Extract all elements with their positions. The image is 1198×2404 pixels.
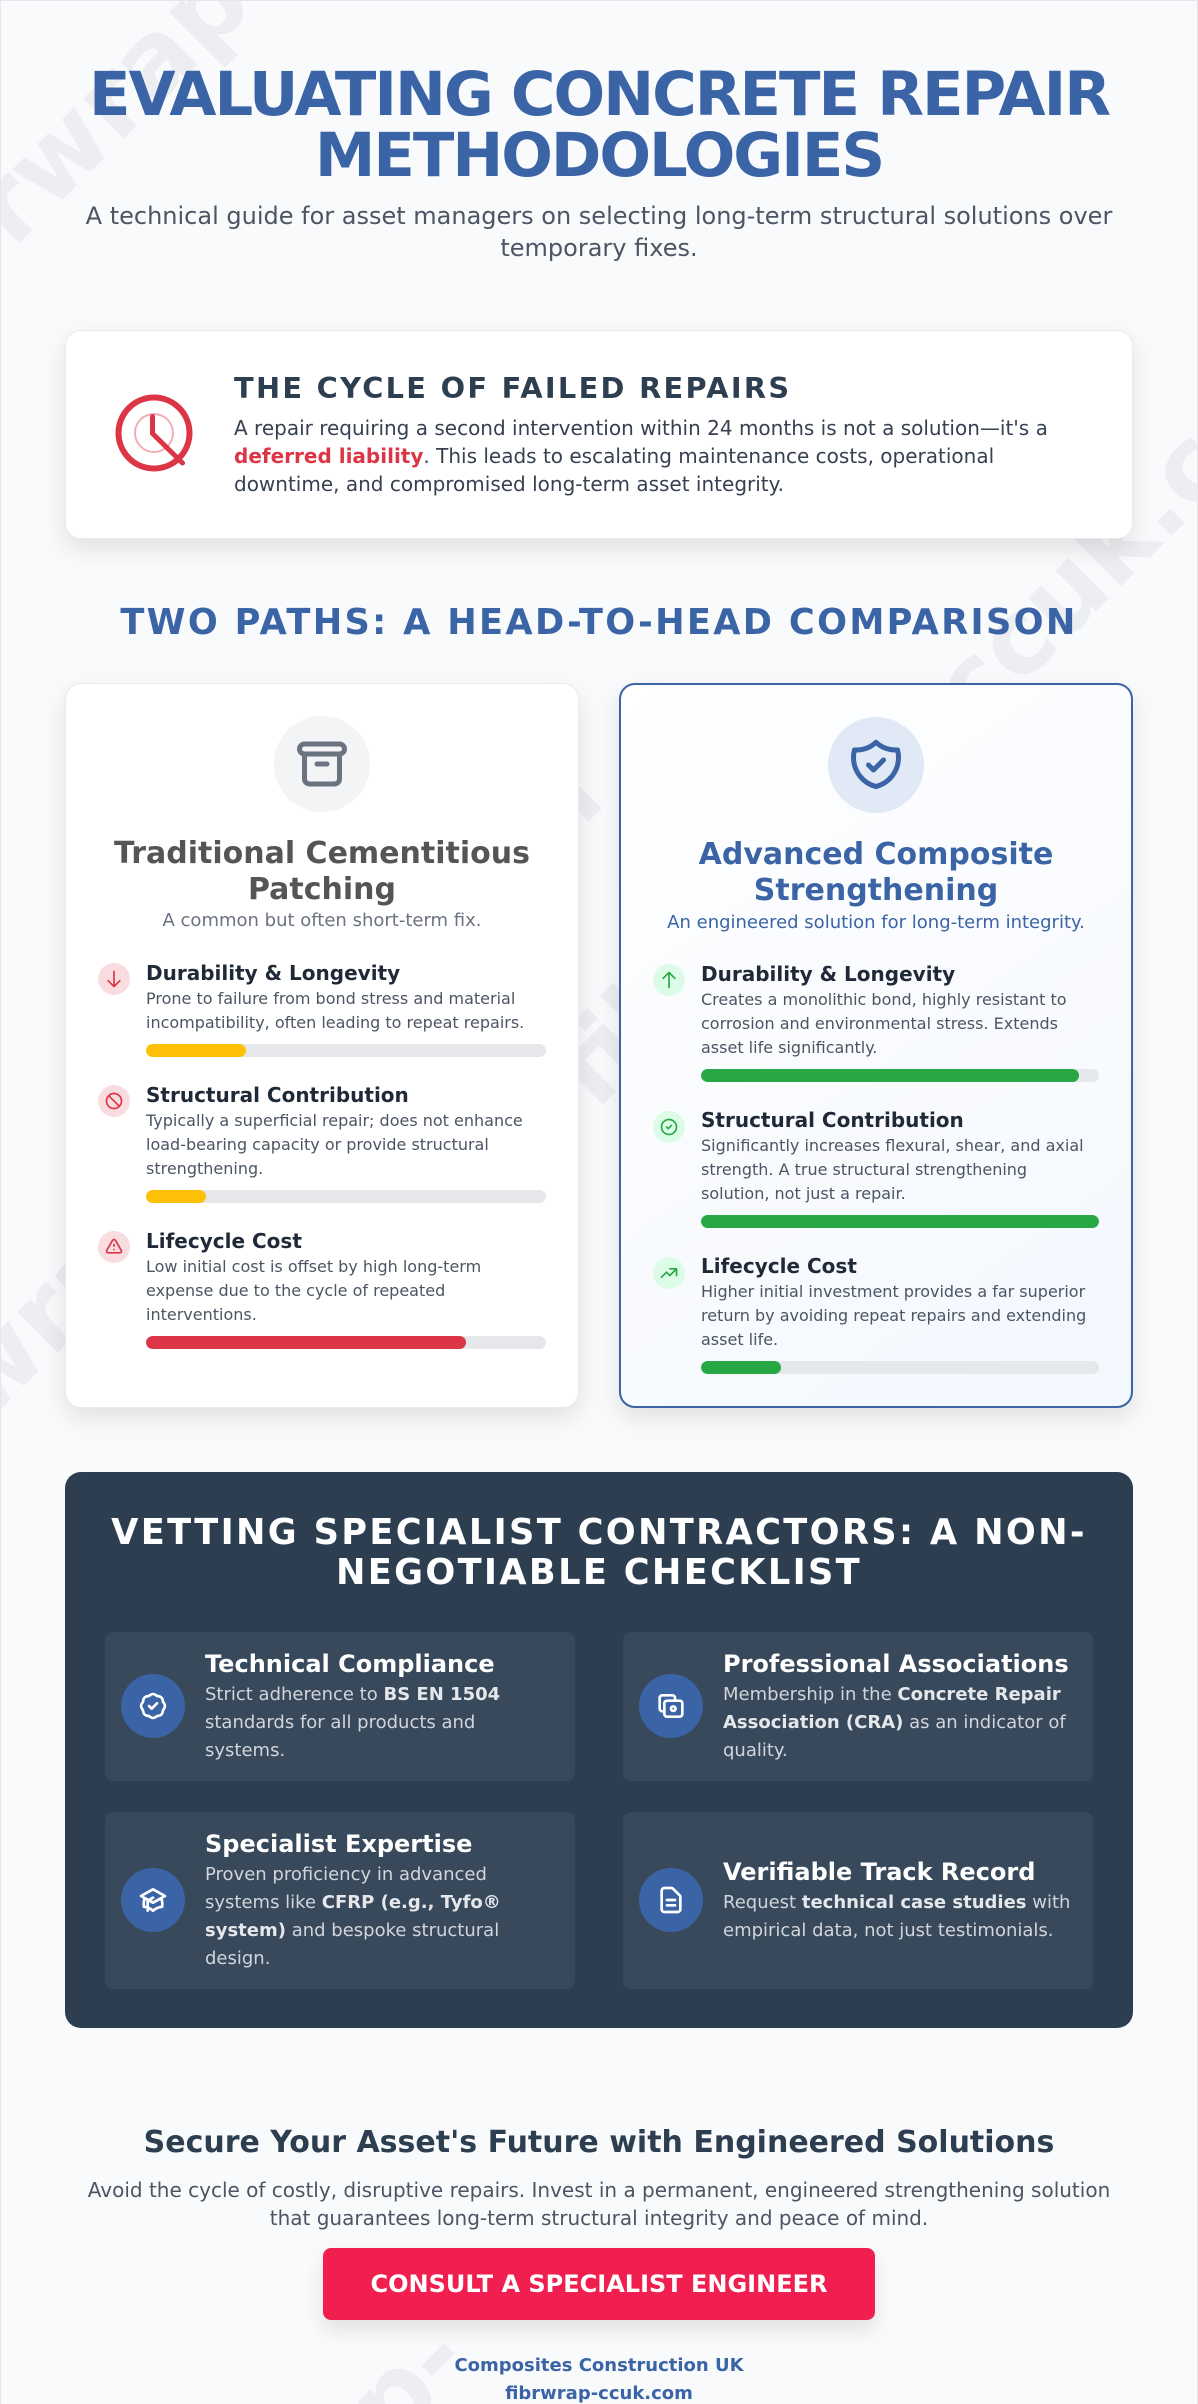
card title: Traditional Cementitious bbox=[114, 836, 530, 871]
call to action text: Avoid the cycle of costly, disruptive repairs. Invest in a permanent, engineered strengthening solution bbox=[88, 2178, 1110, 2202]
structural bar bbox=[701, 1215, 1099, 1228]
call to action button: CONSULT A SPECIALIST ENGINEER bbox=[371, 2270, 827, 2298]
footer: Composites Construction UK bbox=[454, 2355, 744, 2376]
icon: membership cards bbox=[639, 1674, 703, 1738]
item text: system) and bespoke structural bbox=[205, 1920, 499, 1941]
item text: design. bbox=[205, 1948, 270, 1969]
card title bbox=[114, 836, 530, 907]
subtitle bbox=[86, 202, 1112, 262]
section heading: two paths: TWO PATHS: A HEAD-TO-HEAD COMPARISON bbox=[120, 602, 1078, 643]
checklist: verifiable track record bbox=[623, 1812, 1093, 1989]
item text bbox=[205, 1864, 501, 1969]
item heading: Specialist Expertise bbox=[205, 1830, 472, 1858]
body text: downtime, and compromised long-term asset integrity. bbox=[234, 472, 784, 496]
structural text: Typically a superficial repair; does not enhance bbox=[146, 1111, 523, 1130]
icon: academic cap bbox=[121, 1868, 185, 1932]
icon: broken clock bbox=[116, 394, 192, 472]
footer: fibrwrap-ccuk.com bbox=[505, 2383, 693, 2404]
item text: Membership in the Concrete Repair bbox=[723, 1684, 1061, 1705]
durability text bbox=[146, 989, 524, 1032]
call to action heading: Secure Your Asset's Future with Engineered Solutions bbox=[144, 2125, 1054, 2160]
durability bar bbox=[701, 1069, 1099, 1082]
card title bbox=[698, 837, 1053, 908]
body text: A repair requiring a second intervention within 24 months is not a solution—it's a bbox=[234, 416, 1048, 440]
structural text: solution, not just a repair. bbox=[701, 1184, 906, 1203]
icon: document bbox=[639, 1868, 703, 1932]
title: METHODOLOGIES bbox=[315, 121, 883, 191]
durability icon bbox=[653, 964, 685, 996]
item text: quality. bbox=[723, 1740, 788, 1761]
structural text: strengthening. bbox=[146, 1159, 263, 1178]
lifecycle text: return by avoiding repeat repairs and extending bbox=[701, 1306, 1086, 1325]
section heading: NEGOTIABLE CHECKLIST bbox=[336, 1552, 862, 1593]
structural icon bbox=[653, 1111, 685, 1143]
checklist: professional associations bbox=[623, 1632, 1093, 1781]
card title: Advanced Composite bbox=[699, 837, 1053, 872]
card subtitle: A common but often short-term fix. bbox=[162, 910, 482, 931]
structural text: strength. A true structural strengthening bbox=[701, 1160, 1027, 1179]
structural text bbox=[146, 1111, 523, 1178]
durability heading: Durability & Longevity bbox=[701, 962, 955, 986]
title bbox=[89, 60, 1110, 191]
lifecycle text: Higher initial investment provides a far superior bbox=[701, 1282, 1085, 1301]
call to action text: that guarantees long-term structural integrity and peace of mind. bbox=[270, 2206, 928, 2230]
lifecycle icon bbox=[653, 1257, 685, 1289]
card title: Patching bbox=[248, 872, 396, 907]
footer bbox=[454, 2355, 744, 2404]
structural icon bbox=[98, 1085, 130, 1117]
lifecycle text: expense due to the cycle of repeated bbox=[146, 1281, 445, 1300]
item text: systems like CFRP (e.g., Tyfo® bbox=[205, 1892, 501, 1913]
structural text bbox=[701, 1136, 1084, 1203]
durability text: incompatibility, often leading to repeat repairs. bbox=[146, 1013, 524, 1032]
durability bar bbox=[146, 1044, 546, 1057]
structural text: Significantly increases flexural, shear, and axial bbox=[701, 1136, 1084, 1155]
card title: Strengthening bbox=[754, 873, 998, 908]
panel: traditional cementitious patching bbox=[65, 683, 579, 1408]
panel: vetting specialist contractors bbox=[65, 1472, 1133, 2028]
item text bbox=[205, 1684, 500, 1761]
item text: Strict adherence to BS EN 1504 bbox=[205, 1684, 500, 1705]
call to action text bbox=[88, 2178, 1110, 2230]
item heading: Verifiable Track Record bbox=[723, 1858, 1035, 1886]
call to action button bbox=[323, 2248, 875, 2320]
item text: systems. bbox=[205, 1740, 285, 1761]
durability text bbox=[701, 990, 1067, 1057]
lifecycle bar bbox=[701, 1361, 1099, 1374]
item text: empirical data, not just testimonials. bbox=[723, 1920, 1054, 1941]
icon: badge check bbox=[121, 1674, 185, 1738]
item text: Association (CRA) as an indicator of bbox=[723, 1712, 1066, 1733]
structural heading: Structural Contribution bbox=[146, 1083, 409, 1107]
item heading: Professional Associations bbox=[723, 1650, 1069, 1678]
item text: standards for all products and bbox=[205, 1712, 475, 1733]
durability text: Creates a monolithic bond, highly resistant to bbox=[701, 990, 1067, 1009]
subtitle: A technical guide for asset managers on selecting long-term structural solutions over bbox=[86, 202, 1112, 230]
subtitle: temporary fixes. bbox=[500, 234, 698, 262]
lifecycle icon bbox=[98, 1231, 130, 1263]
lifecycle text: Low initial cost is offset by high long-term bbox=[146, 1257, 481, 1276]
lifecycle heading: Lifecycle Cost bbox=[701, 1254, 857, 1278]
body text bbox=[234, 416, 1048, 496]
item heading: Technical Compliance bbox=[205, 1650, 495, 1678]
heading: THE CYCLE OF FAILED REPAIRS bbox=[234, 371, 791, 405]
structural bar bbox=[146, 1190, 546, 1203]
lifecycle text: interventions. bbox=[146, 1305, 257, 1324]
body text: deferred liability. This leads to escalating maintenance costs, operational bbox=[234, 444, 994, 468]
lifecycle bar bbox=[146, 1336, 546, 1349]
lifecycle text bbox=[146, 1257, 481, 1324]
section heading: VETTING SPECIALIST CONTRACTORS: A NON- bbox=[111, 1512, 1087, 1553]
structural heading: Structural Contribution bbox=[701, 1108, 964, 1132]
lifecycle heading: Lifecycle Cost bbox=[146, 1229, 302, 1253]
card subtitle: An engineered solution for long-term integrity. bbox=[667, 912, 1085, 933]
panel: the cycle of failed repairs bbox=[65, 330, 1133, 539]
checklist: specialist expertise bbox=[105, 1812, 575, 1989]
section heading bbox=[111, 1512, 1087, 1593]
durability icon bbox=[98, 963, 130, 995]
durability text: Prone to failure from bond stress and material bbox=[146, 989, 515, 1008]
structural text: load-bearing capacity or provide structural bbox=[146, 1135, 489, 1154]
lifecycle text: asset life. bbox=[701, 1330, 778, 1349]
checklist: technical compliance bbox=[105, 1632, 575, 1781]
panel: advanced composite strengthening bbox=[619, 683, 1133, 1408]
item text bbox=[723, 1684, 1066, 1761]
durability text: corrosion and environmental stress. Extends bbox=[701, 1014, 1058, 1033]
lifecycle text bbox=[701, 1282, 1086, 1349]
item text bbox=[723, 1892, 1070, 1941]
durability heading: Durability & Longevity bbox=[146, 961, 400, 985]
title: EVALUATING CONCRETE REPAIR bbox=[89, 60, 1109, 130]
item text: Proven proficiency in advanced bbox=[205, 1864, 487, 1885]
icon: shield check bbox=[828, 717, 924, 813]
icon: archive box bbox=[274, 716, 370, 812]
durability text: asset life significantly. bbox=[701, 1038, 877, 1057]
item text: Request technical case studies with bbox=[723, 1892, 1070, 1913]
